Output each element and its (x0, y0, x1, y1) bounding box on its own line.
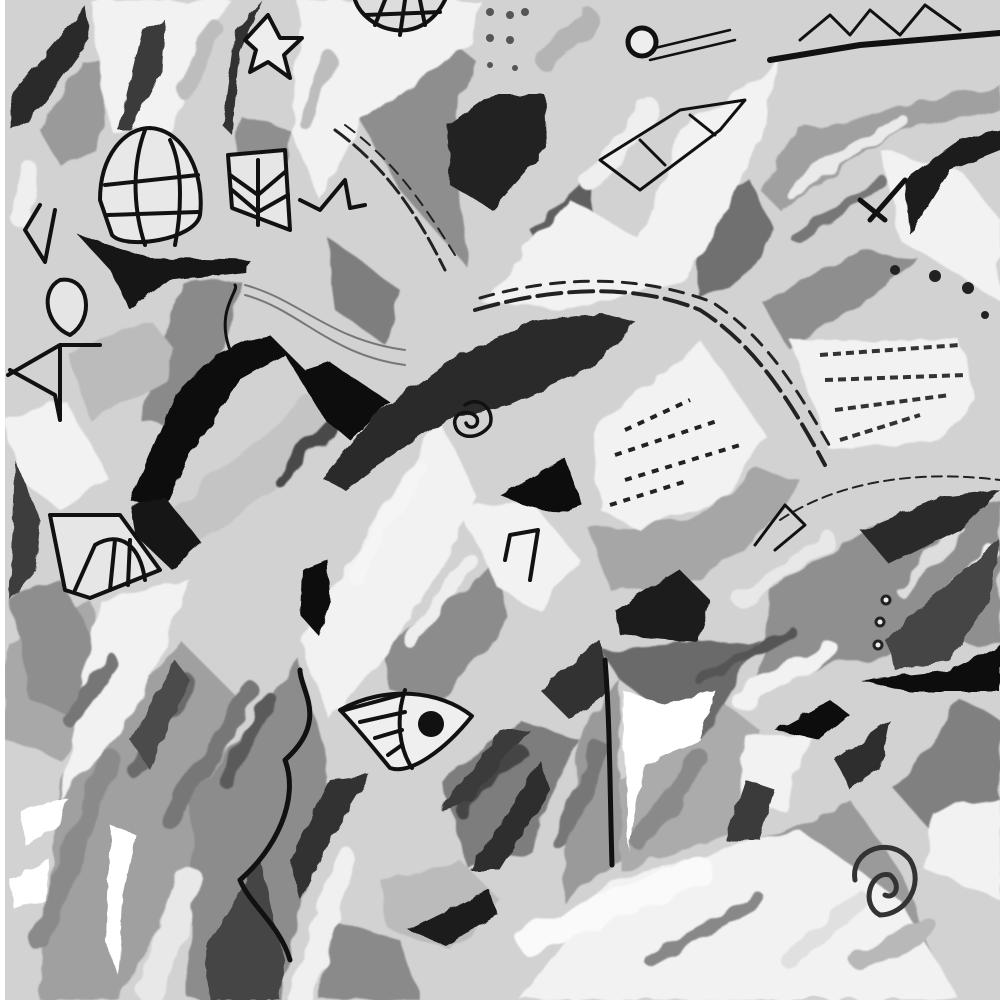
round lattice top left (100, 128, 201, 245)
left canvas edge (0, 0, 5, 1000)
house middle (505, 530, 538, 580)
black zigzag (130, 335, 390, 510)
dry-brush hatch arcs (245, 125, 1000, 520)
central top blob (448, 95, 547, 210)
black shape left middle (300, 560, 330, 635)
eye left (48, 280, 86, 335)
small black wedge (500, 458, 582, 513)
star (245, 15, 302, 78)
long curved lines (240, 670, 310, 960)
dark strokes lower left (130, 660, 190, 770)
right black band (860, 645, 1000, 692)
pure white marks (10, 690, 715, 975)
black foot (130, 497, 202, 570)
dots right panel (874, 596, 890, 649)
lattice top centre (355, 0, 445, 35)
dark lower stroke (290, 775, 370, 900)
house left (8, 205, 100, 420)
dots top centre (486, 8, 529, 71)
dotted ring top right (890, 265, 989, 319)
leaf flecks right (820, 345, 965, 440)
dark patch right (885, 540, 1000, 670)
dark wedge right (860, 490, 1000, 565)
ring top right (628, 28, 656, 56)
black triangle (78, 235, 250, 310)
fish (340, 690, 472, 769)
blade stroke (118, 20, 165, 130)
spiral lower right (855, 847, 915, 915)
central lower blob (615, 570, 710, 642)
large dark arc (322, 313, 636, 490)
dark strip left edge (10, 460, 40, 600)
striped box (228, 150, 290, 230)
angular ink marks (300, 180, 365, 210)
roof zigzag (800, 5, 960, 40)
curved top stroke (222, 0, 262, 135)
fan shape left (50, 515, 160, 598)
dark diagonal top left (10, 5, 90, 130)
dark patch lower centre (775, 700, 850, 740)
dark lower wedge (408, 890, 498, 945)
diamond ink (600, 100, 745, 190)
spiral centre (455, 402, 491, 436)
leaf flecks centre (610, 400, 740, 505)
